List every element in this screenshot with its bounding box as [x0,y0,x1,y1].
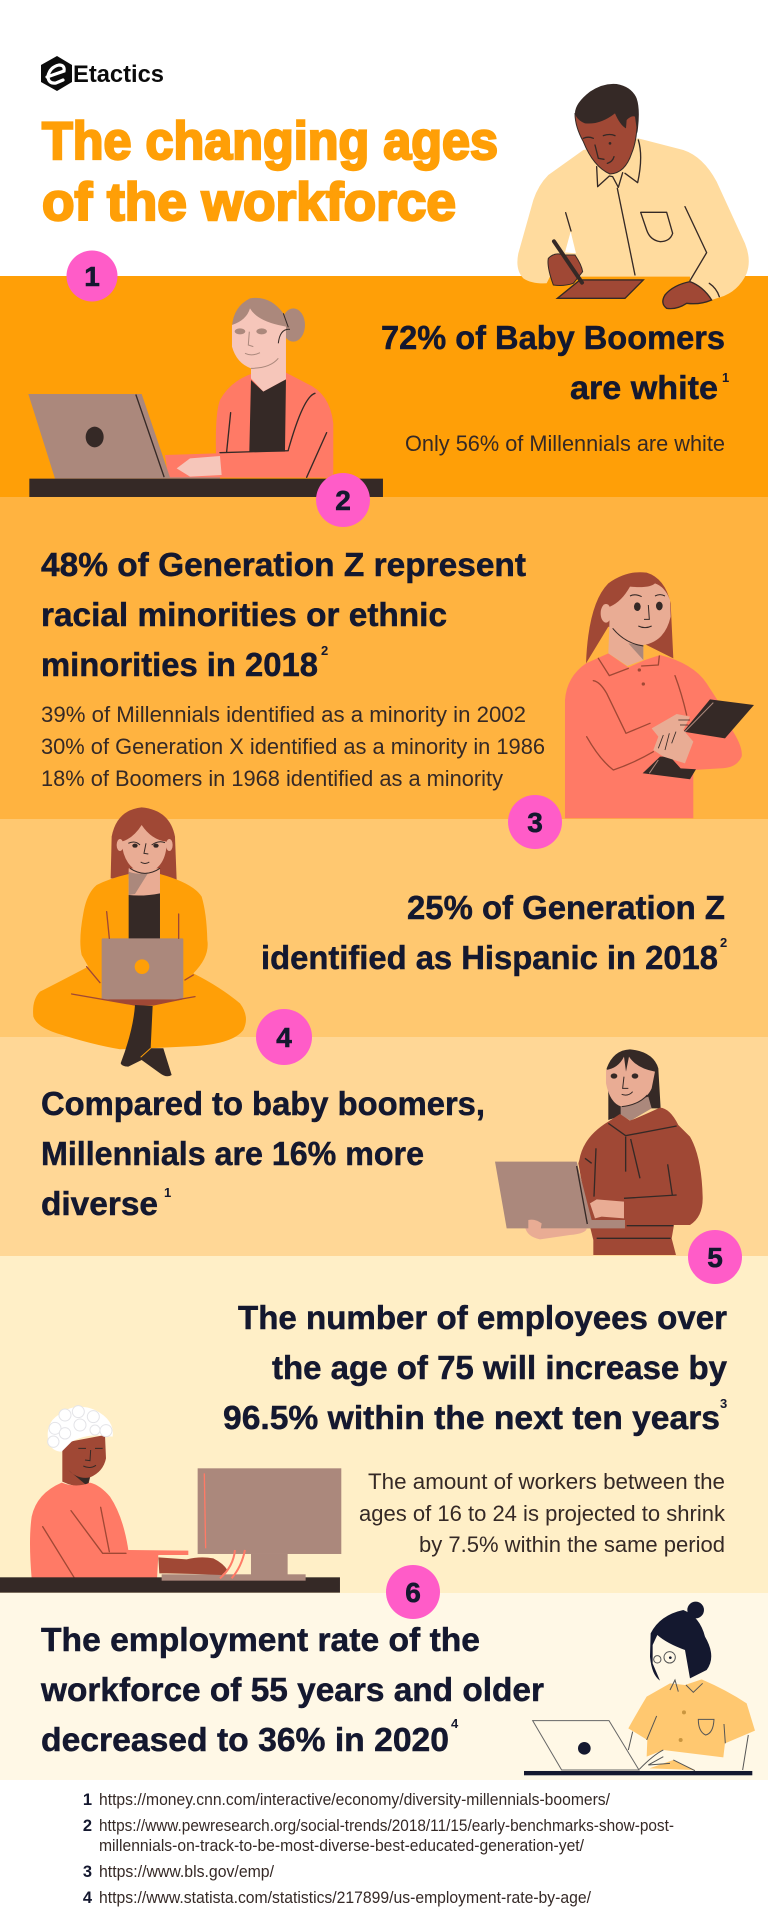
illustration: woman in hoodie holding laptop [495,1049,703,1255]
text: Generation Z minorities statistic: 30% of Generation X identified as a minority in 1986 [41,734,545,759]
white curly hair [48,1406,113,1452]
references list: https://www.statista.com/statistics/217899/us-employment-rate-by-age/ [99,1889,591,1907]
text: Millennials diversity statistic: diverse [41,1185,158,1222]
references list: https://money.cnn.com/interactive/economy/diversity-millennials-boomers/ [99,1791,610,1809]
text: Baby Boomers statistic [381,319,729,456]
illustration: woman with laptop at desk [28,298,383,497]
title: of the workforce [42,173,456,232]
text: Baby Boomers statistic: are white [570,369,718,406]
logo: Etactics [41,56,164,91]
references list: https://www.bls.gov/emp/ [99,1863,274,1881]
text: Generation Z minorities statistic: 39% of Millennials identified as a minority in 2002 [41,702,526,727]
illustration: older woman at desktop computer [0,1406,341,1593]
panel: band 6 background [0,1593,768,1780]
text: employment rate statistic: decreased to 36% in 2020 [41,1721,449,1758]
title [42,112,498,232]
title: The changing ages [42,112,498,171]
number badge 5 [688,1230,742,1284]
references list: millennials-on-track-to-be-most-diverse-best-educated-generation-yet/ [99,1837,584,1855]
panel: band 4 background [0,1037,768,1256]
references list: 3 [83,1863,92,1881]
text: employment rate statistic: workforce of 55 years and older [40,1671,544,1708]
text: employment rate statistic: The employment rate of the [41,1621,480,1658]
text: employees over 75 statistic: the age of 75 will increase by [272,1349,728,1386]
text: Millennials diversity statistic: Millennials are 16% more [41,1135,424,1172]
logo: Etactics: Etactics [73,61,164,88]
number badge 1 [66,250,118,302]
illustration: woman sitting cross-legged with laptop [33,807,246,1076]
panel: band 3 background [0,819,768,1037]
text: Millennials diversity statistic: 1 [164,1185,171,1200]
text: Baby Boomers statistic: 72% of Baby Boomers [381,319,725,356]
text: Hispanic statistic: identified as Hispanic in 2018 [261,939,718,976]
illustration: woman with glasses and laptop [524,1602,755,1775]
references list: https://www.pewresearch.org/social-trends/2018/11/15/early-benchmarks-show-post- [99,1817,674,1835]
number badge 4: 4 [276,1022,292,1053]
references list: 2 [83,1817,92,1835]
text: employees over 75 statistic: The amount of workers between the [368,1469,725,1494]
text: Generation Z minorities statistic: 48% of Generation Z represent [41,546,526,583]
text: Hispanic statistic: 2 [720,935,727,950]
number badge 2 [316,473,370,527]
text: employees over 75 statistic [223,1299,728,1557]
text: Generation Z minorities statistic [41,546,545,791]
text: Baby Boomers statistic: 1 [722,370,729,385]
references list [83,1791,674,1907]
text: employees over 75 statistic: by 7.5% within the same period [419,1532,725,1557]
text: Hispanic statistic [261,889,727,976]
text: employees over 75 statistic: 96.5% within the next ten years [223,1399,720,1436]
number badge 3: 3 [527,807,543,838]
number badge 6 [386,1565,440,1619]
illustration: woman holding tablet [565,572,754,818]
number badge 2: 2 [335,485,351,516]
panel: band 5 background [0,1256,768,1593]
text: Generation Z minorities statistic: minorities in 2018 [41,646,318,683]
text: Hispanic statistic: 25% of Generation Z [407,889,725,926]
text: employees over 75 statistic: The number of employees over [238,1299,727,1336]
text: Millennials diversity statistic: Compared to baby boomers, [41,1085,485,1122]
number badge 6: 6 [405,1577,421,1608]
references list: 1 [83,1791,92,1809]
number badge 4 [256,1009,312,1065]
illustration: man writing on tablet [517,84,749,309]
text: employment rate statistic [40,1621,544,1758]
panel: band 2 background [0,497,768,819]
text: Baby Boomers statistic: Only 56% of Millennials are white [405,431,725,456]
text: employment rate statistic: 4 [451,1716,459,1731]
number badge 3 [508,795,562,849]
number badge 5: 5 [707,1242,723,1273]
references list: 4 [83,1889,93,1907]
text: employees over 75 statistic: ages of 16 to 24 is projected to shrink [359,1501,726,1526]
text: Generation Z minorities statistic: racial minorities or ethnic [41,596,447,633]
text: Generation Z minorities statistic: 2 [321,643,328,658]
text: Generation Z minorities statistic: 18% of Boomers in 1968 identified as a minority [41,766,503,791]
panel: band 1 background [0,276,768,497]
text: employees over 75 statistic: 3 [720,1396,727,1411]
number badge 1: 1 [84,261,100,292]
text: Millennials diversity statistic [41,1085,485,1222]
